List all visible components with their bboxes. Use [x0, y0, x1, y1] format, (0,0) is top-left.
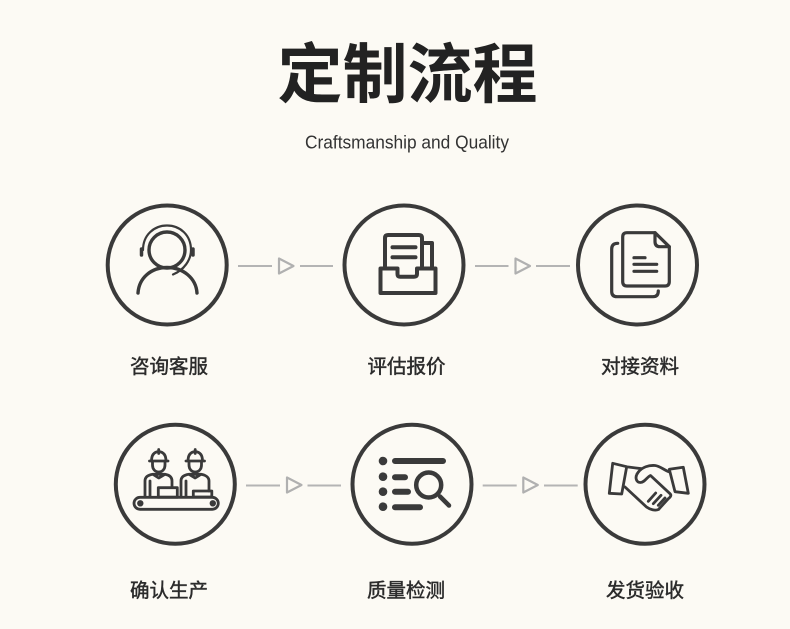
label: 咨询客服	[130, 356, 208, 378]
label: 评估报价	[367, 356, 446, 378]
worker two	[181, 450, 212, 497]
step: confirm production	[116, 425, 235, 602]
subtitle: Craftsmanship and Quality	[305, 132, 509, 152]
step: hand over materials	[578, 206, 697, 378]
step: delivery acceptance	[586, 425, 704, 602]
icon: workers on conveyor	[116, 425, 235, 544]
icon: list with magnifier	[352, 425, 472, 544]
arrow	[483, 478, 578, 492]
step: quality inspection	[352, 425, 472, 602]
title: 定制流程	[277, 38, 538, 111]
icon: headset agent	[108, 206, 227, 324]
step: consult customer service	[108, 206, 227, 378]
label: 质量检测	[367, 580, 445, 602]
arrow	[246, 478, 341, 492]
icon: document tray	[344, 206, 464, 324]
worker one	[145, 450, 177, 497]
label: 对接资料	[601, 356, 679, 378]
icon: handshake	[586, 425, 704, 544]
arrow	[238, 258, 333, 274]
arrow	[475, 258, 570, 274]
label: 发货验收	[606, 580, 684, 602]
label: 确认生产	[130, 580, 208, 602]
icon: documents	[578, 206, 697, 324]
step: evaluate quote	[344, 206, 464, 378]
